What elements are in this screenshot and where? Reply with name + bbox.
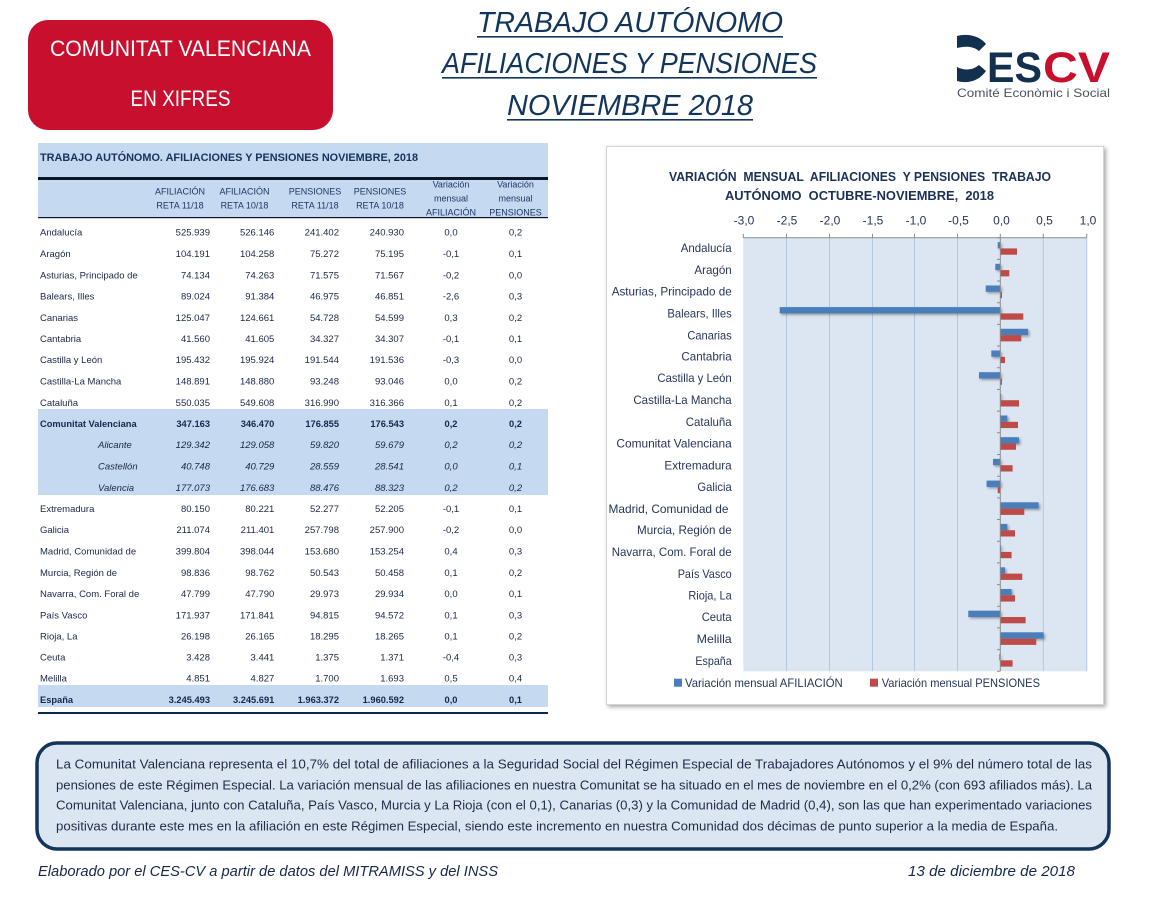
row: Aragón: -0,1	[443, 249, 459, 260]
row: Castilla-La Mancha: 148.880	[240, 376, 274, 388]
axis labels	[734, 214, 1097, 228]
row: Castilla-La Mancha: 93.046	[375, 376, 404, 388]
row: Castellón: 40.748	[181, 462, 211, 472]
row: Aragón: 75.272	[310, 249, 339, 260]
row: Asturias: 74.263	[245, 270, 274, 282]
row: Comunitat Valenciana: 346.470	[241, 419, 274, 429]
logo: CES-CV: ES	[987, 44, 1042, 92]
row: Cataluña: 0,2	[509, 398, 522, 409]
row: Cantabria: Cantabria	[40, 334, 82, 345]
row: Cantabria: 0,1	[509, 334, 522, 345]
row: Madrid: 398.044	[240, 546, 274, 558]
row: Castilla y León: 0,0	[509, 355, 522, 366]
row: Alicante: 129.342	[176, 440, 211, 451]
row: Balears: 0,3	[509, 292, 522, 302]
row: Rioja	[40, 632, 522, 642]
row: Extremadura: 80.221	[245, 504, 274, 515]
row: Galicia	[40, 525, 522, 536]
row: Galicia: 211.401	[241, 525, 274, 536]
chart panel	[606, 146, 1104, 704]
row: Melilla	[40, 674, 522, 684]
row: Castilla-La Mancha: 0,2	[509, 376, 522, 388]
row: Balears: 46.975	[310, 292, 339, 302]
category labels: Canarias	[687, 328, 732, 342]
row: Cataluña: 0,1	[444, 398, 458, 409]
table header: PENSIONES	[289, 186, 341, 196]
table header	[38, 177, 548, 218]
table header: AFILIACIÓN	[155, 186, 205, 196]
row: Castilla y León: -0,3	[443, 355, 459, 366]
row: Comunitat Valenciana: 176.543	[370, 419, 404, 429]
region badge: EN XIFRES	[130, 86, 230, 111]
title: TRABAJO AUTÓNOMO	[477, 6, 783, 39]
row: Murcia: 98.836	[181, 568, 210, 579]
row: Madrid: 0,4	[444, 546, 458, 558]
row: Extremadura: 80.150	[181, 504, 210, 515]
row: Extremadura: 0,1	[509, 504, 522, 515]
row: Alicante: 129.058	[240, 440, 275, 451]
row: Navarra: 29.973	[310, 589, 339, 600]
table header: Variación	[433, 180, 469, 190]
row: Murcia: 50.543	[310, 568, 339, 579]
table bottom rule	[38, 712, 548, 714]
row: Canarias: 124.661	[240, 313, 274, 324]
row: Rioja: 0,2	[509, 632, 522, 642]
row: Ceuta: 3.428	[186, 652, 210, 664]
row: Canarias: 54.599	[375, 313, 404, 324]
row: País Vasco: 94.815	[310, 610, 339, 622]
category labels: Andalucía	[681, 241, 732, 255]
row: Aragón: Aragón	[40, 249, 71, 260]
row: Canarias: 0,2	[509, 313, 522, 324]
table title band: TRABAJO AUTÓNOMO. AFILIACIONES Y PENSIONES NOVIEMBRE, 2018	[40, 151, 418, 164]
row: Aragón: 104.191	[176, 249, 210, 260]
row: Cataluña: 316.366	[370, 398, 404, 409]
row: Castilla-La Mancha	[40, 376, 522, 388]
row: Castilla-La Mancha: Castilla-La Mancha	[40, 376, 122, 388]
category labels: Cataluña	[686, 415, 732, 429]
row: Andalucía: Andalucía	[40, 228, 83, 238]
category labels: Murcia, Región de	[637, 523, 732, 537]
row: Cantabria: 34.327	[310, 334, 339, 345]
category labels: Navarra, Com. Foral de	[612, 545, 732, 559]
row: Extremadura: Extremadura	[40, 504, 95, 515]
row: Comunitat Valenciana: 347.163	[176, 419, 210, 429]
row: Alicante: 0,2	[444, 440, 458, 451]
table header: mensual	[434, 194, 468, 204]
row: Ceuta: Ceuta	[40, 652, 66, 664]
row: Extremadura: 52.205	[375, 504, 404, 515]
row: Valencia: 177.073	[176, 483, 211, 494]
row: Comunitat Valenciana	[40, 419, 522, 429]
row: Rioja: 26.165	[245, 632, 274, 642]
summary text box: positivas durante este mes en la afiliación en este Régimen Especial, siendo este incremento en nuestra Comunidad dos décimas de punto superior a la media de España.	[56, 820, 1058, 834]
row: Rioja: 18.265	[375, 632, 404, 642]
axis labels: 0,0	[993, 214, 1010, 228]
row: Balears: 91.384	[245, 292, 274, 302]
row: Rioja: 18.295	[310, 632, 339, 642]
row: Castilla y León: 191.544	[305, 355, 339, 366]
date: 13 de diciembre de 2018	[908, 864, 1075, 880]
row: Aragón	[40, 249, 522, 260]
region badge: COMUNITAT VALENCIANA	[50, 36, 311, 61]
row: Madrid: 399.804	[176, 546, 210, 558]
row: País Vasco: 171.937	[176, 610, 210, 622]
row: Andalucía: 0,2	[509, 228, 522, 238]
row: Ceuta: 1.375	[315, 652, 339, 664]
logo: CES-CV	[957, 35, 1110, 100]
row: Castilla-La Mancha: 0,0	[444, 376, 458, 388]
row: Aragón: 0,1	[509, 249, 522, 260]
row: Castilla-La Mancha: 93.248	[310, 376, 339, 388]
row: Canarias: Canarias	[40, 313, 78, 324]
row: Castilla y León	[40, 355, 522, 366]
row: Comunitat Valenciana: 176.855	[305, 419, 339, 429]
row: Ceuta: 0,3	[509, 652, 522, 664]
row: Murcia: 0,2	[509, 568, 522, 579]
category labels: Extremadura	[664, 458, 732, 472]
row: Castilla y León: Castilla y León	[40, 355, 102, 366]
plot area	[743, 234, 1087, 671]
title: NOVIEMBRE 2018	[507, 90, 753, 122]
row: Galicia: 257.900	[370, 525, 404, 536]
row: Valencia	[98, 483, 523, 494]
row: Galicia: 0,0	[509, 525, 522, 536]
row: Navarra	[40, 589, 522, 600]
row: Ceuta: 3.441	[251, 652, 274, 664]
legend: Variación mensual PENSIONES	[882, 676, 1040, 690]
row: Rioja: Rioja, La	[40, 632, 78, 642]
row: Murcia: 98.762	[245, 568, 274, 579]
category labels: Cantabria	[681, 350, 732, 364]
category axis	[997, 238, 1000, 671]
category labels: Ceuta	[702, 610, 732, 624]
row: Navarra: 0,1	[509, 589, 522, 600]
row: Canarias: 0,3	[444, 313, 458, 324]
row: Navarra: 29.934	[375, 589, 404, 600]
row: Andalucía: 241.402	[305, 228, 339, 238]
row: Alicante: 0,2	[509, 440, 523, 451]
row: Andalucía: 526.146	[240, 228, 274, 238]
highlight band: España	[38, 685, 548, 707]
row: Castellón	[98, 462, 522, 472]
row: Alicante: Alicante	[97, 440, 132, 451]
logo: CES-CV: CV	[1043, 44, 1110, 92]
region badge	[28, 20, 333, 130]
row: Melilla: 1.700	[315, 674, 339, 684]
table header: RETA 10/18	[221, 200, 268, 210]
row: Balears: Balears, Illes	[40, 292, 95, 302]
row: Castilla y León: 195.924	[240, 355, 274, 366]
category labels: Galicia	[697, 480, 732, 494]
row: Cataluña: 550.035	[176, 398, 210, 409]
row: Valencia: Valencia	[98, 483, 134, 494]
row: Madrid: 153.680	[305, 546, 339, 558]
row: Castilla-La Mancha: 148.891	[176, 376, 210, 388]
row: Murcia: 50.458	[375, 568, 404, 579]
row: Galicia: Galicia	[40, 525, 70, 536]
data table	[38, 143, 548, 714]
legend	[674, 675, 1040, 690]
row: Andalucía	[40, 228, 522, 238]
row: Aragón: 75.195	[375, 249, 404, 260]
category labels: Madrid, Comunidad de	[608, 502, 729, 516]
row: Murcia: Murcia, Región de	[40, 568, 117, 579]
row: Canarias	[40, 313, 522, 324]
category labels: Asturias, Principado de	[612, 284, 732, 298]
row: Comunitat Valenciana: Comunitat Valenciana	[40, 419, 137, 429]
row: Melilla: 0,5	[444, 674, 458, 684]
row: España: 3.245.493	[169, 695, 210, 705]
category labels: Castilla-La Mancha	[633, 393, 732, 407]
row: Valencia: 88.476	[310, 483, 340, 494]
row: Valencia: 88.323	[375, 483, 405, 494]
row: Asturias	[40, 270, 522, 282]
table header: Variación	[497, 180, 534, 190]
category labels: España	[695, 654, 732, 668]
row: Asturias: 74.134	[181, 270, 210, 282]
category labels: Comunitat Valenciana	[616, 436, 732, 450]
row: Melilla: 0,4	[509, 674, 522, 684]
row: España	[40, 695, 522, 705]
row: Andalucía: 0,0	[444, 228, 458, 238]
row: Valencia: 176.683	[240, 483, 275, 494]
row: Galicia: -0,2	[443, 525, 459, 536]
category labels	[608, 241, 732, 668]
highlight band: Comunitat Valenciana	[38, 409, 548, 495]
row: Melilla: 4.851	[186, 674, 210, 684]
row: Valencia: 0,2	[444, 483, 458, 494]
row: Comunitat Valenciana: 0,2	[445, 419, 457, 429]
row: Alicante	[97, 440, 523, 451]
category labels: País Vasco	[678, 567, 732, 581]
row: Extremadura: 52.277	[310, 504, 339, 515]
row: Comunitat Valenciana: 0,2	[509, 419, 522, 429]
row: Cataluña: 316.990	[305, 398, 339, 409]
axis labels: -1,0	[906, 214, 927, 228]
row: País Vasco: País Vasco	[40, 610, 87, 622]
chart title: AUTÓNOMO OCTUBRE-NOVIEMBRE, 2018	[725, 188, 994, 203]
row: Balears: -2,6	[443, 292, 459, 302]
axis labels: -2,5	[777, 214, 798, 228]
row: País Vasco: 94.572	[375, 610, 404, 622]
row: España: 0,1	[509, 695, 522, 705]
row: Cantabria: 41.560	[181, 334, 210, 345]
summary text box	[37, 743, 1109, 849]
row: España: España	[40, 695, 74, 705]
row: Castellón: Castellón	[98, 462, 138, 472]
bars: variación mensual afiliación	[780, 242, 1044, 660]
row: España: 1.963.372	[298, 695, 339, 705]
table header: PENSIONES	[354, 186, 406, 196]
table title band	[38, 143, 548, 178]
row: País Vasco	[40, 610, 522, 622]
row: Castellón: 0,1	[509, 462, 522, 472]
axis labels: -0,5	[948, 214, 969, 228]
row: Alicante: 59.679	[375, 440, 405, 451]
row: Cantabria: -0,1	[443, 334, 459, 345]
axis labels: 1,0	[1080, 214, 1097, 228]
row: Cantabria: 41.605	[245, 334, 274, 345]
row: Castilla y León: 191.536	[370, 355, 404, 366]
summary text box: Comunitat Valenciana, junto con Cataluña, País Vasco, Murcia y La Rioja (con el 0,1), Canarias (0,3) y la Comunidad de Madrid (0,4), son las que han experimentado variaciones	[56, 798, 1092, 812]
row: Balears	[40, 292, 522, 302]
row: Galicia: 257.798	[305, 525, 339, 536]
category labels: Rioja, La	[688, 588, 732, 602]
row: Canarias: 125.047	[176, 313, 210, 324]
table header: AFILIACIÓN	[219, 186, 270, 196]
row: Rioja: 26.198	[181, 632, 210, 642]
row: Canarias: 54.728	[310, 313, 339, 324]
category labels: Balears, Illes	[667, 306, 732, 320]
row: Asturias: -0,2	[443, 270, 459, 282]
row: Ceuta	[40, 652, 522, 664]
row: Aragón: 104.258	[240, 249, 274, 260]
row: Cantabria	[40, 334, 522, 345]
row: Alicante: 59.820	[310, 440, 340, 451]
row: Extremadura	[40, 504, 522, 515]
axis labels: 0,5	[1036, 214, 1053, 228]
row: Balears: 89.024	[181, 292, 210, 302]
category labels: Castilla y León	[657, 371, 732, 385]
table header: RETA 10/18	[356, 200, 404, 210]
row: Asturias: Asturias, Principado de	[40, 270, 138, 282]
row: Madrid	[40, 546, 522, 558]
table header: RETA 11/18	[156, 200, 204, 210]
row: Ceuta: -0,4	[443, 652, 459, 664]
row: Castellón: 28.559	[309, 462, 340, 472]
row: España: 1.960.592	[363, 695, 404, 705]
row: Ceuta: 1.371	[380, 652, 404, 664]
logo: CES-CV: Comité Econòmic i Social	[957, 86, 1110, 100]
row: España: 3.245.691	[233, 695, 274, 705]
row: Rioja: 0,1	[444, 632, 458, 642]
title: AFILIACIONES Y PENSIONES	[440, 48, 818, 80]
summary text box: pensiones de este Régimen Especial. La variación mensual de las afiliaciones en nuestra Comunitat se ha situado en el mes de noviembre en el 0,2% (con 693 afiliados más). La	[56, 778, 1092, 792]
row: Melilla: 1.693	[380, 674, 404, 684]
row: Navarra: 47.799	[181, 589, 210, 600]
row: Cataluña	[40, 398, 522, 409]
row: Melilla: Melilla	[40, 674, 68, 684]
row: Navarra: Navarra, Com. Foral de	[40, 589, 139, 600]
chart title	[669, 169, 1051, 203]
axis labels: -1,5	[863, 214, 884, 228]
row: Castilla y León: 195.432	[176, 355, 210, 366]
table header: PENSIONES	[489, 208, 542, 218]
row: Madrid: 0,3	[509, 546, 522, 558]
row: Navarra: 0,0	[444, 589, 458, 600]
table header: AFILIACIÓN	[426, 208, 476, 218]
table header: mensual	[498, 194, 533, 204]
row: Cantabria: 34.307	[375, 334, 404, 345]
row: Asturias: 71.567	[375, 270, 404, 282]
row: Balears: 46.851	[375, 292, 404, 302]
bars: variación mensual pensiones	[998, 248, 1036, 667]
row: Cataluña: 549.608	[240, 398, 274, 409]
row: Melilla: 4.827	[251, 674, 274, 684]
category labels: Melilla	[697, 632, 732, 646]
row: País Vasco: 0,1	[444, 610, 458, 622]
summary text box: La Comunitat Valenciana representa el 10,7% del total de afiliaciones a la Seguridad Social del Régimen Especial de Trabajadores Autónomos y el 9% del número total de las	[56, 758, 1092, 772]
row: Castellón: 40.729	[245, 462, 275, 472]
row: Castellón: 28.541	[374, 462, 404, 472]
row: Navarra: 47.790	[245, 589, 274, 600]
row: Extremadura: -0,1	[443, 504, 459, 515]
row: País Vasco: 0,3	[509, 610, 522, 622]
row: País Vasco: 171.841	[240, 610, 274, 622]
row: Andalucía: 525.939	[176, 228, 210, 238]
legend: Variación mensual AFILIACIÓN	[685, 675, 843, 690]
row: Valencia: 0,2	[509, 483, 523, 494]
row: Asturias: 71.575	[310, 270, 339, 282]
row: Cataluña: Cataluña	[40, 398, 79, 409]
row: Murcia: 0,1	[444, 568, 458, 579]
row: España: 0,0	[445, 695, 457, 705]
row: Murcia	[40, 568, 522, 579]
axis labels: -2,0	[820, 214, 841, 228]
source note: Elaborado por el CES-CV a partir de datos del MITRAMISS y del INSS	[38, 864, 498, 880]
row: Galicia: 211.074	[176, 525, 210, 536]
row: Andalucía: 240.930	[370, 228, 404, 238]
table header: RETA 11/18	[291, 200, 339, 210]
row: Castellón: 0,0	[444, 462, 458, 472]
axis labels: -3,0	[734, 214, 755, 228]
title	[440, 6, 818, 122]
row: Madrid: Madrid, Comunidad de	[40, 546, 136, 558]
category labels: Aragón	[694, 263, 732, 277]
row: Madrid: 153.254	[370, 546, 404, 558]
chart title: VARIACIÓN MENSUAL AFILIACIONES Y PENSIONES TRABAJO	[669, 169, 1051, 184]
row: Asturias: 0,0	[509, 270, 522, 282]
